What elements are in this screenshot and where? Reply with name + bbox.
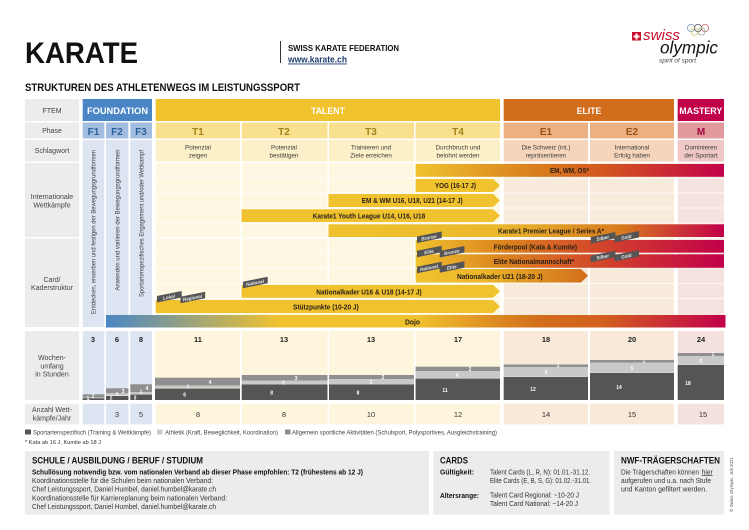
stacked bars: hours per week: 12 [530, 387, 536, 393]
panel: foundation: Entdecken, erwerben und festigen der Bewegungsgrundformen [90, 150, 98, 314]
logo: swiss olympic: swiss [643, 27, 680, 44]
panel: elite: E2 [626, 127, 639, 138]
bar: YOG [416, 179, 500, 192]
card badges: Gold [621, 234, 632, 241]
card badges: Silber [596, 235, 610, 242]
stacked bars: hours per week: 1 [116, 392, 119, 398]
stacked bars: hours per week: 8 [270, 390, 273, 396]
panel: weekly hours: 13 [367, 335, 375, 344]
panel: weekly hours: 20 [628, 335, 636, 344]
row: competitions per year: 8 [282, 410, 286, 419]
row: competitions per year: 15 [628, 410, 636, 419]
panel: elite: International [615, 144, 649, 152]
stacked bars: hours per week: 1 [643, 359, 646, 365]
row: competitions per year: 12 [454, 410, 462, 419]
panel: mastery [678, 99, 724, 315]
row: competitions per year: 10 [367, 410, 375, 419]
panel: cards: CARDS [440, 456, 468, 466]
panel: NWF: und Kanton gefiltert werden. [621, 487, 707, 494]
logo: swiss olympic: spirit of sport [659, 58, 696, 64]
federation block: SWISS KARATE FEDERATION [288, 43, 399, 53]
panel: weekly hours: 8 [139, 335, 143, 344]
panel: talent [156, 99, 500, 315]
panel: mastery: M [697, 127, 705, 138]
panel: weekly hours: 13 [280, 335, 288, 344]
panel: weekly hours: in Stunden [35, 372, 69, 378]
panel: elite: repräsentieren [526, 152, 567, 160]
panel: talent: Potenzial [271, 144, 297, 152]
stacked bars: hours per week: 1 [712, 352, 715, 358]
bar: YOG: YOG (16-17 J) [435, 183, 476, 190]
row labels column: Wettkämpfe [33, 202, 71, 210]
panel: school: Koordinationsstelle für Karriereplanung beim nationalen Verband: [32, 495, 227, 502]
panel: talent: Potenzial [185, 144, 211, 152]
panel: foundation: FOUNDATION [87, 106, 148, 117]
panel: weekly hours: umfang [40, 364, 64, 370]
panel: elite: ELITE [577, 106, 601, 117]
row: competitions per year: kämpfe/Jahr [33, 416, 72, 422]
copyright: © Swiss Olympic, Juli 2021 [728, 457, 734, 512]
panel: talent: Trainieren und [351, 144, 392, 152]
stacked bars: hours per week: 1 [557, 363, 560, 369]
bar: Nationalkader U16 and U18: Nationalkader U16 & U18 (14-17 J) [316, 289, 422, 296]
stacked bars: hours per week: 2 [469, 367, 472, 373]
row: competitions per year: 8 [196, 410, 200, 419]
card badges: Elite [446, 264, 457, 271]
bar: Karate1 Premier League: Karate1 Premier League / Series A* [498, 228, 604, 235]
card badges: Silber [596, 253, 610, 261]
panel: elite: Die Schweiz (int.) [522, 144, 570, 152]
row: competitions per year: Anzahl Wett- [32, 407, 73, 414]
panel: weekly hours: 24 [697, 335, 706, 344]
stacked bars: hours per week: 4 [209, 380, 212, 386]
panel: talent: T4 [452, 127, 464, 138]
panel: weekly hours: Wochen- [38, 355, 67, 362]
row: competitions per year: 15 [699, 410, 707, 419]
stacked bars: hours per week: 8 [357, 390, 360, 396]
stacked bars: hours per week: 1 [187, 384, 190, 390]
bar: Nationalkader U21 [416, 269, 588, 282]
panel: cards: Altersrange: [440, 493, 479, 500]
title: KARATE [25, 37, 138, 70]
bar: EM, WM, OS: EM, WM, OS* [550, 168, 589, 175]
stacked bars: hours per week: 5 [545, 370, 548, 376]
panel: elite [504, 99, 674, 315]
bar: EM and WM juniors [328, 194, 500, 207]
panel: weekly hours: 6 [115, 335, 119, 344]
panel: mastery: der Sportart [684, 152, 718, 160]
row: competitions per year: 14 [542, 410, 550, 419]
stacked bars: hours per week: 5 [700, 359, 703, 365]
panel: school: Koordinationsstelle für die Schulen beim nationalen Verband: [32, 478, 213, 485]
card badges [157, 231, 639, 303]
stacked bars: hours per week: 1 [140, 390, 143, 396]
row labels column [25, 99, 79, 327]
panel: talent: T1 [192, 127, 204, 138]
panel: NWF [614, 451, 724, 515]
stacked bars: hours per week: 14 [616, 385, 622, 391]
panel: weekly hours: 3 [91, 335, 95, 344]
card badges: Regional [183, 293, 203, 302]
row: competitions per year [25, 404, 724, 424]
footnote: * Kata ab 16 J, Kumite ab 18 J [25, 440, 101, 446]
panel: NWF: NWF-TRÄGERSCHAFTEN [621, 456, 720, 466]
panel: school [25, 451, 429, 515]
stacked bars: hours per week: 2 [282, 380, 285, 386]
panel: cards: Talent Cards (L, R, N): 01.01.-31.12. [490, 469, 590, 476]
bar: Elite Nationalmannschaft: Elite Nationalmannschaft* [494, 259, 574, 266]
federation block: www.karate.ch [287, 54, 347, 64]
card badges: Bronze [421, 234, 438, 242]
panel: foundation [83, 99, 152, 327]
stacked bars: hours per week [83, 352, 724, 402]
panel: NWF: Die Trägerschaften können [621, 469, 699, 476]
bar: Nationalkader U21: Nationalkader U21 (18-20 J) [457, 274, 543, 281]
card badges: Gold [621, 253, 632, 260]
federation block [280, 41, 399, 64]
panel: NWF: aufgerufen und u.a. nach Stufe [621, 478, 711, 485]
card badges: Lokal [163, 293, 176, 301]
row labels column: Phase [42, 128, 62, 135]
row: competitions per year: 3 [115, 410, 119, 419]
row labels column: Internationale [31, 194, 73, 201]
legend: Athletik (Kraft, Beweglichkeit, Koordination) [165, 430, 278, 436]
panel: talent: belohnt werden [436, 152, 480, 160]
panel: foundation: Sportartenspezifisches Engagement und/oder Wettkampf [138, 150, 146, 297]
panel: talent: T3 [365, 127, 377, 138]
panel: weekly hours: 17 [454, 335, 462, 344]
panel: school: SCHULE / AUSBILDUNG / BERUF / STUDIUM [32, 456, 203, 466]
stacked bars: hours per week: 3 [295, 376, 298, 382]
bar: Dojo: Dojo [405, 319, 420, 326]
panel: weekly hours [25, 331, 724, 400]
panel: foundation: F2 [111, 127, 123, 138]
heading: STRUKTUREN DES ATHLETENWEGS IM LEISTUNGSSPORT [25, 82, 300, 94]
legend: Sportartenspezifisch (Training & Wettkämpfe) [33, 430, 151, 436]
row labels column: Schlagwort [35, 148, 69, 155]
panel: cards: Gültigkeit: [440, 469, 474, 476]
panel: talent: Ziele erreichen [350, 152, 392, 160]
legend [25, 430, 497, 436]
bar: Dojo [106, 315, 726, 328]
stacked bars: hours per week: 6 [183, 392, 186, 398]
panel: cards [433, 451, 610, 515]
panel: school: Chef Leistungssport, Daniel Humbel, daniel.humbel@karate.ch [32, 504, 216, 511]
card badges: National [246, 279, 265, 287]
stacked bars: hours per week: 4 [456, 373, 459, 379]
stacked bars: hours per week: 2 [382, 375, 385, 381]
panel: school: Schullösung notwendig bzw. vom nationalen Verband ab dieser Phase empfohlen: T2 (frühestens ab 12 J) [32, 469, 363, 476]
bar: EM and WM juniors: EM & WM U16, U18, U21 (14-17 J) [362, 198, 463, 205]
panel: foundation: F1 [88, 127, 100, 138]
panel: elite: E1 [540, 127, 553, 138]
legend: Allgemein sportliche Aktivitäten (Schulsport, Polysportives, Ausgleichstraining) [292, 430, 497, 436]
stacked bars: hours per week: 2 [92, 394, 95, 400]
stacked bars: hours per week: 11 [442, 388, 448, 394]
stacked bars: hours per week: 2 [110, 396, 113, 402]
panel: foundation: F3 [135, 127, 147, 138]
panel: talent: TALENT [311, 106, 345, 117]
row labels column: FTEM [42, 108, 62, 115]
panel: weekly hours: 18 [542, 335, 550, 344]
bar: Stützpunkte: Stützpunkte (10-20 J) [293, 304, 359, 311]
bar: Nationalkader U16 and U18 [242, 285, 500, 298]
bar: Karate1 Youth League [242, 209, 500, 222]
row labels column: Card/ [43, 277, 61, 284]
card badges: Bronze [444, 248, 460, 256]
panel: NWF: hier [702, 469, 713, 476]
panel: elite: Erfolg haben [614, 152, 650, 160]
row: competitions per year: 5 [139, 410, 143, 419]
bar: Stützpunkte [156, 300, 500, 313]
row labels column: Kaderstruktur [31, 285, 74, 292]
stacked bars: hours per week: 3 [370, 380, 373, 386]
panel: talent: zeigen [189, 152, 208, 160]
bar: EM, WM, OS [416, 164, 724, 177]
panel: cards: Elite Cards (E, B, S, G): 01.02.-31.01. [490, 478, 591, 485]
logo: swiss olympic [632, 24, 718, 64]
panel: school: Chef Leistungssport, Daniel Humbel, daniel.humbel@karate.ch [32, 487, 216, 494]
logo: swiss olympic: olympic [660, 38, 718, 58]
stacked bars: hours per week: 3 [122, 389, 125, 395]
bar: Elite Nationalmannschaft [416, 254, 724, 268]
panel: foundation: Anwenden und variieren der Bewegungsgrundformen [114, 149, 122, 290]
card badges: National [420, 264, 439, 272]
panel: mastery: Dominieren [685, 144, 718, 152]
stacked bars: hours per week: 4 [146, 386, 149, 392]
panel: talent: T2 [278, 127, 290, 138]
panel: weekly hours: 11 [194, 335, 202, 344]
bar: Förderpool: Förderpool (Kata & Kumite) [494, 244, 577, 251]
panel: cards: Talent Card Regional: ~10-20 J [490, 492, 579, 500]
bar: Karate1 Premier League [328, 224, 724, 237]
stacked bars: hours per week: 18 [685, 381, 691, 387]
panel: talent: Durchbruch und [436, 144, 481, 152]
panel: talent: bestätigen [269, 152, 299, 160]
stacked bars: hours per week: 5 [631, 366, 634, 372]
card badges: Elite [424, 248, 435, 255]
panel: cards: Talent Card National: ~14-20 J [490, 501, 578, 508]
panel: mastery: MASTERY [679, 106, 723, 117]
stacked bars: hours per week: 3 [134, 396, 137, 402]
bar: Karate1 Youth League: Karate1 Youth League U14, U16, U18 [313, 213, 425, 220]
stacked bars: hours per week: 1 [87, 396, 90, 402]
bar: Förderpool [416, 240, 724, 253]
